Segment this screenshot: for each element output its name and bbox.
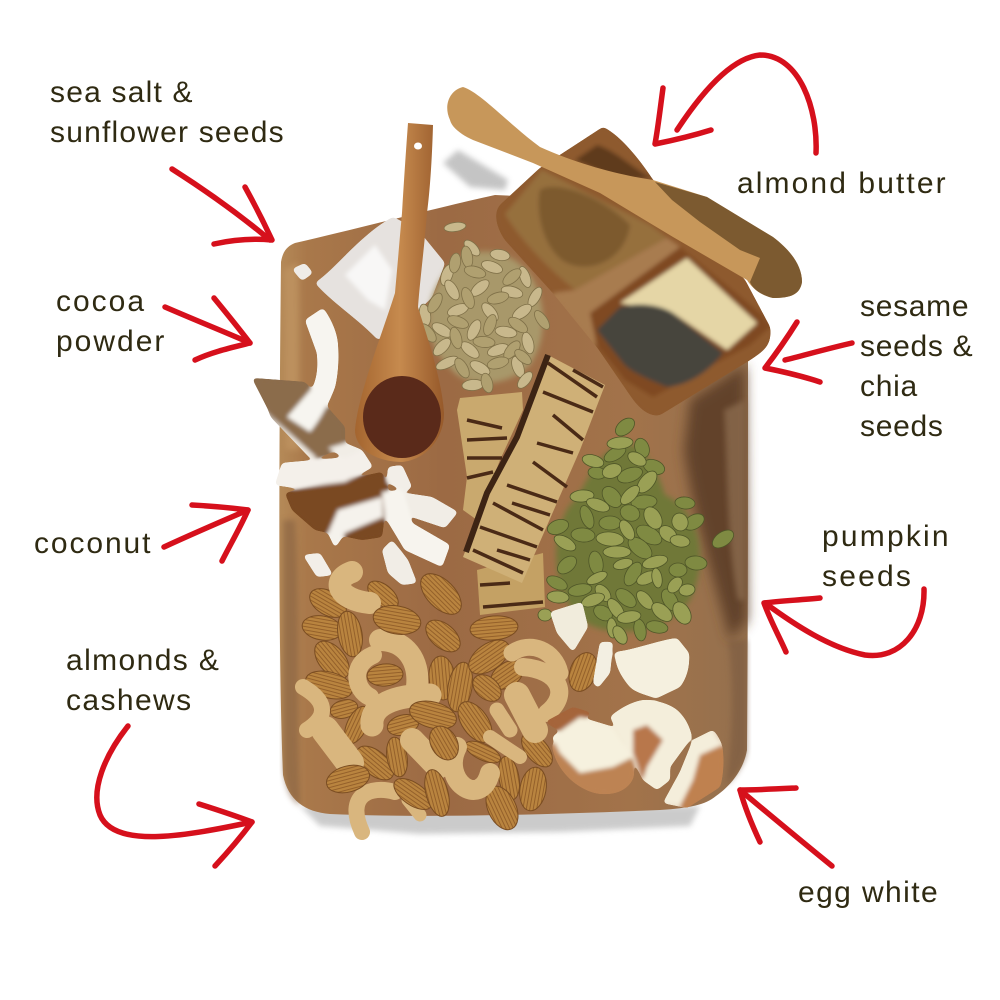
shadows behind board [300, 150, 700, 834]
pile: pumpkin seeds [538, 415, 737, 647]
label: sesame seeds & chia seeds: chia [860, 370, 918, 403]
almonds on top of the pile [323, 602, 464, 819]
label: almonds & cashews [66, 644, 220, 717]
pile: almonds [300, 566, 602, 835]
pile: coconut [252, 308, 458, 585]
knife: wooden spreader [447, 87, 802, 298]
label: sesame seeds & chia seeds [860, 290, 973, 443]
pile: sea salt [292, 217, 445, 340]
label: pumpkin seeds: seeds [822, 560, 913, 593]
label: cocoa powder: powder [56, 325, 166, 358]
wooden spoon with cocoa powder [355, 123, 444, 462]
label: sea salt & sunflower seeds [50, 76, 285, 149]
label: almond butter: almond butter [737, 167, 948, 200]
nutrition bars [457, 355, 605, 615]
pile: egg shells [545, 602, 723, 808]
label: cocoa powder: cocoa [56, 285, 146, 318]
label: coconut: coconut [34, 527, 152, 560]
cutting board [279, 195, 748, 816]
label: almonds & cashews: cashews [66, 684, 193, 717]
label: pumpkin seeds: pumpkin [822, 520, 951, 553]
label: pumpkin seeds [822, 520, 951, 593]
label: cocoa powder [56, 285, 166, 358]
pile: sunflower seeds [417, 221, 552, 394]
arrow: sesame seeds and chia seeds [765, 322, 852, 382]
arrow: sea salt & sunflower seeds [172, 169, 272, 244]
arrow: cocoa powder [165, 298, 250, 360]
label: sea salt & sunflower seeds: sunflower seeds [50, 116, 285, 149]
tray: almond butter and seeds [496, 127, 770, 415]
label: egg white: egg white [798, 876, 939, 909]
arrow: pumpkin seeds [764, 589, 924, 656]
arrow: almond butter [655, 55, 816, 153]
label: sea salt & sunflower seeds: sea salt & [50, 76, 194, 109]
arrow: coconut [164, 505, 248, 561]
pile: cashews [303, 572, 560, 832]
label: almonds & cashews: almonds & [66, 644, 220, 677]
label: sesame seeds & chia seeds: seeds [860, 410, 944, 443]
label: sesame seeds & chia seeds: seeds & [860, 330, 973, 363]
arrow: egg white [740, 788, 832, 866]
label: sesame seeds & chia seeds: sesame [860, 290, 969, 323]
arrow: almonds & cashews [97, 726, 252, 866]
